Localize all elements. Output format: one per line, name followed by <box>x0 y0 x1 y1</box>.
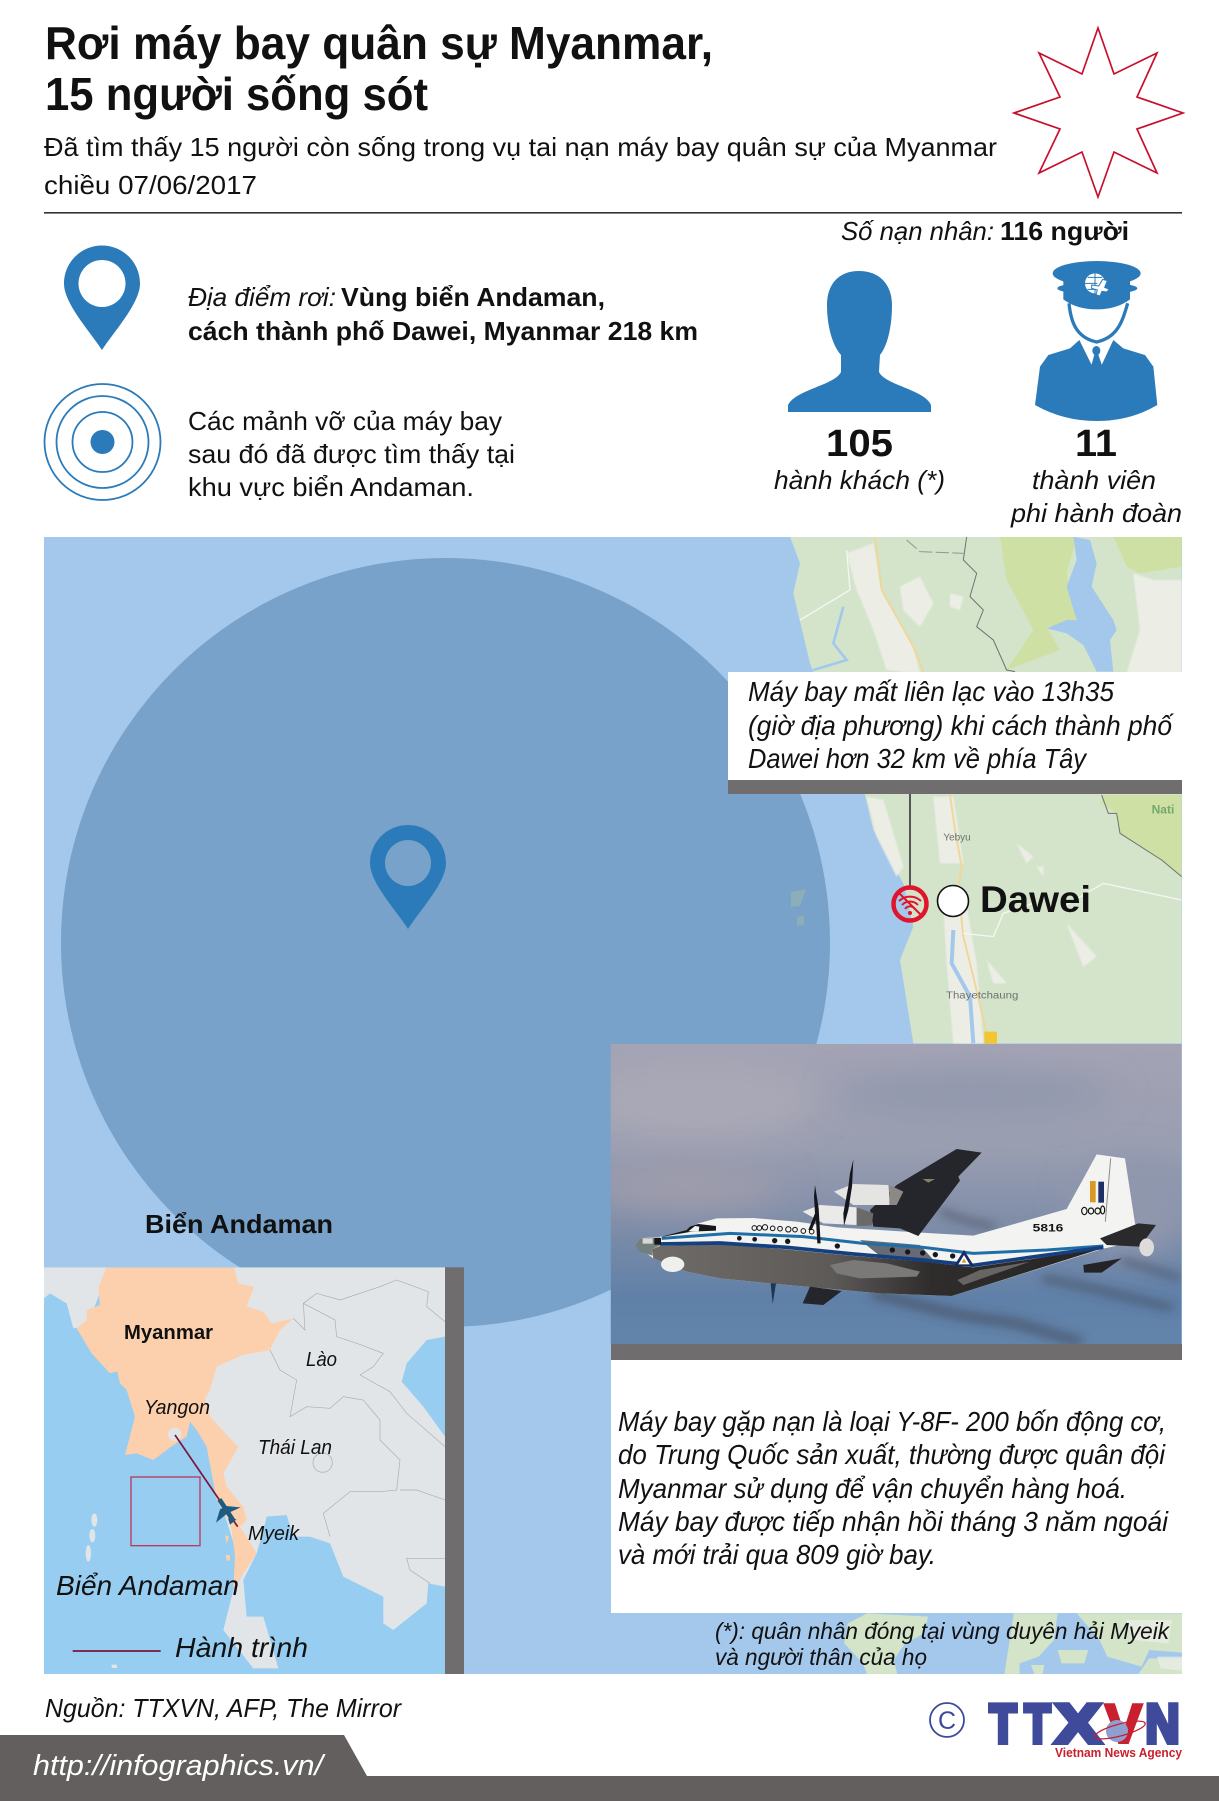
panel: aircraft description: Máy bay gặp nạn là loại Y-8F- 200 bốn động cơ, <box>618 1406 1166 1437</box>
inset labels: Lào <box>306 1349 337 1371</box>
icon: target rings <box>44 384 160 500</box>
title: Rơi máy bay quân sự Myanmar, <box>45 17 713 69</box>
subtitle <box>44 132 997 200</box>
footnote: (*): quân nhân đóng tại vùng duyên hải Myeik <box>715 1618 1170 1644</box>
text: crash location: Vùng biển Andaman, <box>341 282 605 312</box>
icon: crash pin <box>370 825 446 929</box>
title: 15 người sống sót <box>45 68 428 120</box>
terrain map: Nati <box>1152 802 1174 816</box>
roundel <box>954 1250 974 1266</box>
photo caption bar <box>611 1344 1182 1360</box>
flight route <box>175 1435 238 1527</box>
inset labels: Biển Andaman <box>56 1570 239 1601</box>
icon: pilot <box>1035 261 1157 421</box>
stat: 11 crew <box>1010 423 1182 528</box>
logo: TTXVN: T <box>990 1692 1016 1754</box>
source: Nguồn: TTXVN, AFP, The Mirror <box>45 1693 402 1723</box>
subtitle: chiều 07/06/2017 <box>44 170 257 200</box>
copyright mark <box>930 1703 964 1737</box>
panel: aircraft description: do Trung Quốc sản xuất, thường được quân đội <box>618 1439 1166 1470</box>
stat: 105 passengers <box>774 423 945 495</box>
fuselage white <box>635 1154 1143 1296</box>
copyright mark: C <box>938 1707 956 1735</box>
callout: lost contact: Dawei hơn 32 km về phía Tây <box>748 743 1088 774</box>
fairings and pods <box>661 1257 684 1272</box>
panel: aircraft description <box>611 1360 1182 1613</box>
country borders <box>270 1280 445 1583</box>
marker: Dawei: Dawei <box>980 879 1091 920</box>
logo: TTXVN: V <box>1105 1692 1142 1754</box>
windows <box>737 1236 955 1259</box>
stat: 105 passengers: 105 <box>826 423 893 465</box>
inset labels: Myanmar <box>124 1322 213 1344</box>
logo: TTXVN: T <box>1024 1692 1050 1754</box>
legend line <box>72 1650 161 1652</box>
logo: TTXVN: Vietnam News Agency <box>1055 1745 1183 1760</box>
text: debris found: sau đó đã được tìm thấy tại <box>188 439 515 469</box>
panel: aircraft description: và mới trải qua 809 giờ bay. <box>618 1539 936 1570</box>
inset labels: Myeik <box>248 1523 300 1545</box>
text: debris found: Các mảnh vỡ của máy bay <box>188 406 502 436</box>
callout: lost contact: Máy bay mất liên lạc vào 13h35 <box>748 676 1114 707</box>
logo: TTXVN <box>990 1692 1183 1760</box>
cockpit <box>662 1224 716 1237</box>
icon: passenger <box>788 271 931 412</box>
victims heading: 116 người <box>1000 216 1129 246</box>
wing shadow on fuselage <box>860 1240 935 1262</box>
tail flag <box>1090 1181 1096 1202</box>
inset labels: Yangon <box>144 1397 210 1419</box>
icon: crash star <box>1014 28 1183 197</box>
serial number: 5816 <box>1033 1223 1063 1235</box>
photo: military aircraft <box>580 1044 1192 1344</box>
wing <box>870 1149 982 1236</box>
stat: 105 passengers: hành khách (*) <box>774 465 945 495</box>
tail marks <box>1082 1206 1105 1215</box>
marker: Bangkok <box>313 1453 332 1472</box>
label: Andaman Sea: Biển Andaman <box>145 1209 333 1239</box>
text: debris found <box>188 406 515 502</box>
inset labels: Hành trình <box>175 1632 308 1663</box>
terrain map: Yebyu <box>943 833 971 844</box>
panel: aircraft description: Myanmar sử dụng để vận chuyển hàng hoá. <box>618 1473 1127 1504</box>
logo: TTXVN: X <box>1056 1692 1101 1754</box>
text: crash location: cách thành phố Dawei, Myanmar 218 km <box>188 316 698 346</box>
marker: Yangon <box>168 1428 181 1441</box>
engines <box>834 1184 890 1205</box>
text: crash location <box>188 282 698 346</box>
fuselage script marks <box>752 1225 814 1234</box>
callout: lost contact: (giờ địa phương) khi cách thành phố <box>748 710 1174 741</box>
victims heading <box>841 216 1129 246</box>
text: crash location: Địa điểm rơi: <box>188 282 336 312</box>
inset labels <box>56 1322 337 1663</box>
stat: 11 crew: 11 <box>1075 423 1117 465</box>
marker: Dawei <box>936 884 1088 918</box>
panel: aircraft description: Máy bay được tiếp nhận hồi tháng 3 năm ngoái <box>618 1506 1169 1537</box>
stat: 11 crew: thành viên <box>1032 465 1156 495</box>
map panel <box>44 537 1190 1675</box>
footnote <box>715 1618 1170 1670</box>
text: debris found: khu vực biển Andaman. <box>188 472 474 502</box>
title <box>45 17 713 120</box>
subtitle: Đã tìm thấy 15 người còn sống trong vụ tai nạn máy bay quân sự của Myanmar <box>44 132 997 162</box>
inset map <box>44 1267 464 1674</box>
icon: plane <box>216 1499 241 1525</box>
connector line <box>909 794 911 886</box>
small islands in zone <box>791 889 806 926</box>
Myanmar <box>77 1267 293 1588</box>
danger zone circle <box>61 558 830 1327</box>
footer url: http://infographics.vn/ <box>33 1750 326 1782</box>
terrain map <box>790 537 1182 1044</box>
tail plane <box>1100 1223 1156 1247</box>
aircraft <box>635 1149 1156 1305</box>
belly <box>652 1244 1103 1296</box>
callout: lost contact <box>728 672 1182 794</box>
bottom islands <box>844 1613 1190 1675</box>
propellers <box>808 1159 853 1243</box>
inset labels: Thái Lan <box>258 1437 332 1459</box>
logo: TTXVN: N <box>1146 1692 1180 1754</box>
photo sky and smoke <box>580 1044 1192 1344</box>
icon: location pin <box>64 246 140 350</box>
footer band <box>0 1735 1219 1801</box>
stripes <box>660 1233 1103 1265</box>
neighbouring land <box>44 1267 445 1668</box>
icon: no signal <box>894 888 926 920</box>
footnote: và người thân của họ <box>715 1644 927 1670</box>
terrain map: Thayetchaung <box>946 990 1018 1001</box>
victims heading: Số nạn nhân: <box>841 216 994 246</box>
search area box <box>131 1477 200 1546</box>
stat: 11 crew: phi hành đoàn <box>1010 498 1182 528</box>
